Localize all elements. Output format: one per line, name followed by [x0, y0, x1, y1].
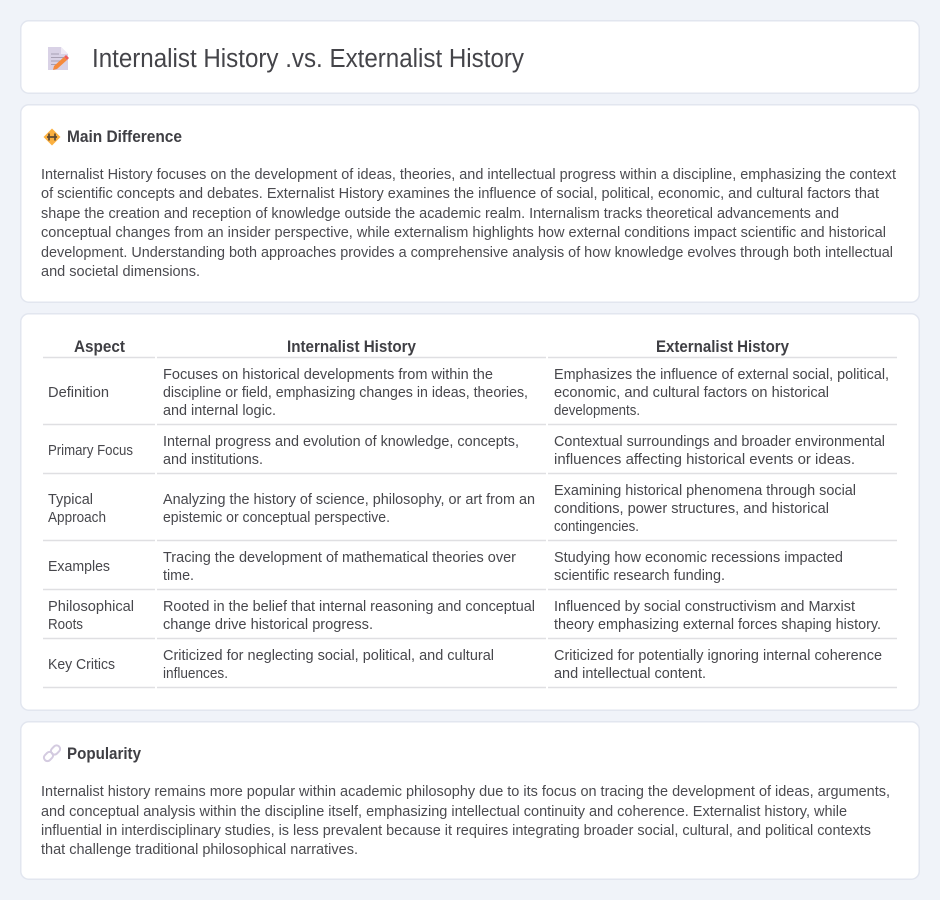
text: main difference body: shape the creation and reception of knowledge outside the academic realm. Internalism tracks theoretical advancements and	[41, 206, 839, 222]
row: primary focus: Contextual surroundings and broader environmental	[554, 434, 885, 450]
table header: Internalist History	[287, 338, 417, 356]
icon: orange diamond	[44, 128, 60, 146]
row: definition: Emphasizes the influence of external social, political,	[554, 367, 889, 383]
row: typical approach: contingencies.	[554, 519, 639, 535]
row: examples: Tracing the development of mathematical theories over	[163, 550, 516, 566]
panel: title	[21, 21, 919, 93]
row: examples: Studying how economic recessions impacted	[554, 550, 843, 566]
row: philosophical roots: Influenced by social constructivism and Marxist	[554, 599, 855, 615]
text: popularity body: that challenge traditional philosophical narratives.	[41, 842, 358, 858]
row: primary focus: Primary Focus	[48, 443, 133, 459]
row: philosophical roots: Philosophical	[48, 599, 134, 615]
icon: document with pencil	[48, 47, 69, 70]
text: main difference body: and societal dimensions.	[41, 264, 200, 280]
title text: Internalist History .vs. Externalist History	[92, 45, 524, 73]
row: key critics: Criticized for potentially ignoring internal coherence	[554, 648, 882, 664]
row: key critics: Key Critics	[48, 657, 115, 673]
text: popularity body: and conceptual analysis within the discipline itself, emphasizing intellectual continuity and coherence. Externalist history, while	[41, 804, 847, 820]
panel: main difference	[21, 105, 919, 302]
text: popularity body: influential in interdisciplinary studies, is less prevalent because it requires integrating broader social, cultural, and political contexts	[41, 823, 871, 839]
text: main difference body: Internalist History focuses on the development of ideas, theories, and intellectual progress within a discipline, emphasizing the context	[41, 167, 896, 183]
row: definition: Definition	[48, 385, 109, 401]
row: typical approach: Examining historical phenomena through social	[554, 483, 856, 499]
panel: popularity	[21, 722, 919, 879]
row: typical approach: conditions, power structures, and historical	[554, 501, 829, 517]
text: popularity body	[41, 784, 890, 858]
row: typical approach: Analyzing the history of science, philosophy, or art from an	[163, 492, 535, 508]
row: key critics: and intellectual content.	[554, 666, 706, 682]
heading: main difference: Main Difference	[67, 128, 182, 146]
row: examples	[43, 550, 897, 590]
row: philosophical roots: Rooted in the belief that internal reasoning and conceptual	[163, 599, 535, 615]
text: main difference body: conceptual changes from an insider perspective, while externalism highlights how external conditions impact scientific and historical	[41, 225, 886, 241]
row: definition: developments.	[554, 403, 640, 419]
row: primary focus: and institutions.	[163, 452, 263, 468]
row: philosophical roots	[43, 599, 897, 638]
text: main difference body: development. Understanding both approaches provides a comprehensive analysis of how knowledge evolves through both intellectual	[41, 245, 893, 261]
panel: comparison table	[21, 314, 919, 710]
row: key critics	[43, 648, 897, 688]
row: key critics: influences.	[163, 666, 228, 682]
row: philosophical roots: change drive historical progress.	[163, 617, 373, 633]
row: primary focus: influences affecting historical events or ideas.	[554, 452, 855, 468]
row: examples: scientific research funding.	[554, 568, 725, 584]
row: philosophical roots: Roots	[48, 617, 83, 633]
text: main difference body: of scientific concepts and debates. Externalist History examines the influence of social, political, economic, and cultural factors that	[41, 186, 879, 202]
row: typical approach: Approach	[48, 510, 106, 526]
row: primary focus: Internal progress and evolution of knowledge, concepts,	[163, 434, 519, 450]
table header: Aspect	[74, 338, 126, 356]
row: typical approach	[43, 483, 897, 540]
row: definition: Focuses on historical developments from within the	[163, 367, 493, 383]
row: examples: time.	[163, 568, 194, 584]
row: typical approach: Typical	[48, 492, 93, 508]
row: definition: discipline or field, emphasizing changes in ideas, theories,	[163, 385, 528, 401]
row: definition: economic, and cultural factors on historical	[554, 385, 829, 401]
table header	[43, 338, 897, 358]
row: typical approach: epistemic or conceptual perspective.	[163, 510, 390, 526]
row: philosophical roots: theory emphasizing external forces shaping history.	[554, 617, 881, 633]
table header: Externalist History	[656, 338, 790, 356]
icon: chain link	[42, 744, 62, 763]
row: primary focus	[43, 434, 897, 474]
row: definition: and internal logic.	[163, 403, 276, 419]
text: main difference body	[41, 167, 896, 280]
text: popularity body: Internalist history remains more popular within academic philosophy due to its focus on tracing the development of ideas, arguments,	[41, 784, 890, 800]
row: definition	[43, 367, 897, 424]
heading: popularity: Popularity	[67, 745, 142, 763]
row: key critics: Criticized for neglecting social, political, and cultural	[163, 648, 494, 664]
row: examples: Examples	[48, 559, 110, 575]
